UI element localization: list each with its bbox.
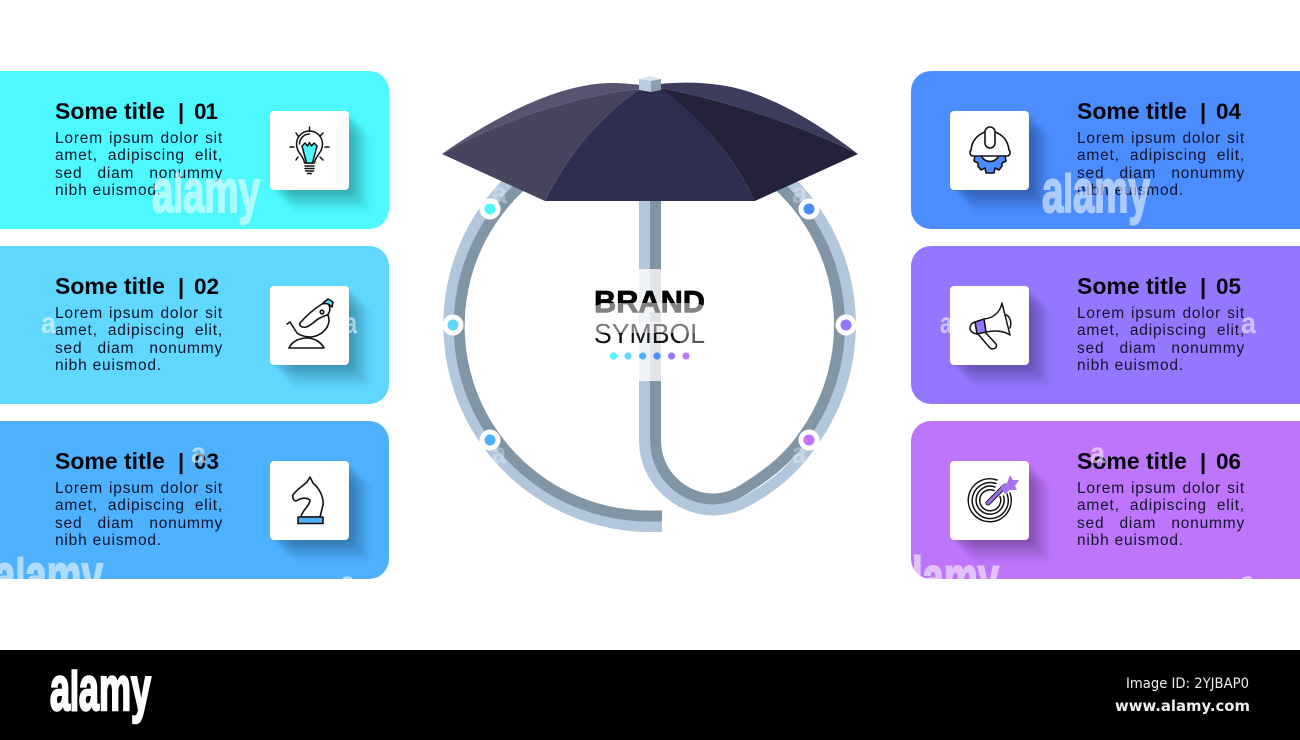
- body text: nibh euismod.: [1077, 532, 1184, 549]
- panel: 04: [911, 71, 1300, 229]
- body text: nibh euismod.: [1077, 357, 1184, 374]
- title: [55, 448, 219, 474]
- body text: amet, adipiscing elit,: [1077, 497, 1245, 514]
- icon card: light bulb: [270, 111, 349, 190]
- title: [55, 98, 218, 124]
- watermarks: a: [1240, 566, 1255, 599]
- icon card: megaphone: [950, 286, 1029, 365]
- body text: [55, 130, 223, 199]
- body text: amet, adipiscing elit,: [55, 147, 223, 164]
- watermarks: a: [1090, 437, 1105, 470]
- watermarks: a: [1241, 307, 1256, 340]
- icon card: chess knight: [270, 461, 349, 540]
- colour dots: [610, 352, 690, 360]
- body text: [55, 480, 223, 549]
- title: |: [1200, 99, 1206, 124]
- body text: sed diam nonummy: [55, 515, 223, 532]
- body text: amet, adipiscing elit,: [55, 497, 223, 514]
- watermarks: a: [492, 177, 507, 210]
- watermarks: lamy: [912, 545, 999, 608]
- watermarks: a: [792, 437, 806, 470]
- icon card: helmet and gear: [950, 111, 1029, 190]
- brand symbol text: BRAND: [594, 284, 705, 319]
- body text: [1077, 130, 1245, 199]
- title: [1077, 273, 1241, 300]
- pole highlight band: [639, 269, 661, 381]
- icon card: microscope: [270, 286, 349, 365]
- umbrella handle and ring: [449, 164, 850, 526]
- body text: nibh euismod.: [55, 532, 162, 549]
- umbrella canopy: [442, 76, 858, 201]
- title: 03: [194, 449, 219, 474]
- title: 02: [194, 274, 219, 299]
- website: www.alamy.com: [1115, 697, 1250, 715]
- body text: [1077, 480, 1245, 549]
- watermarks: a: [792, 177, 807, 210]
- watermarks: alamy: [1042, 158, 1150, 225]
- title: [1077, 98, 1241, 124]
- panel: 01: [0, 71, 389, 229]
- title: Some title: [55, 448, 165, 474]
- body text: Lorem ipsum dolor sit: [55, 480, 223, 497]
- title: 01: [194, 99, 217, 124]
- watermarks: a: [345, 307, 357, 340]
- body text: nibh euismod.: [1077, 182, 1184, 199]
- body text: Lorem ipsum dolor sit: [55, 305, 223, 322]
- panel: 05: [911, 246, 1300, 404]
- body text: Lorem ipsum dolor sit: [1077, 305, 1245, 322]
- brand symbol text: [594, 284, 706, 349]
- panel: 02: [0, 246, 389, 404]
- body text: nibh euismod.: [55, 182, 162, 199]
- body text: [1077, 305, 1245, 374]
- body text: amet, adipiscing elit,: [55, 322, 223, 339]
- title: |: [178, 449, 184, 474]
- title: [1077, 448, 1241, 474]
- body text: Lorem ipsum dolor sit: [1077, 130, 1245, 147]
- watermarks: a: [940, 307, 952, 340]
- title: 05: [1216, 274, 1241, 299]
- body text: amet, adipiscing elit,: [1077, 322, 1245, 339]
- title: [55, 273, 219, 300]
- title: Some title: [1077, 273, 1187, 299]
- footer bar: [0, 650, 1300, 740]
- footer logo: alamy: [50, 655, 151, 724]
- title: |: [178, 274, 184, 299]
- body text: Lorem ipsum dolor sit: [55, 130, 223, 147]
- watermarks: alamy: [152, 158, 260, 225]
- watermarks: a: [340, 566, 355, 599]
- body text: sed diam nonummy: [1077, 515, 1245, 532]
- brand symbol text: SYMBOL: [594, 318, 705, 349]
- title: Some title: [55, 273, 165, 299]
- image id: Image ID: 2YJBAP0: [1126, 676, 1249, 692]
- body text: sed diam nonummy: [1077, 165, 1245, 182]
- body text: amet, adipiscing elit,: [1077, 147, 1245, 164]
- body text: sed diam nonummy: [55, 165, 223, 182]
- body text: [55, 305, 223, 374]
- body text: sed diam nonummy: [1077, 340, 1245, 357]
- title: 04: [1216, 99, 1241, 124]
- canopy cap: [639, 76, 661, 92]
- title: |: [178, 99, 184, 124]
- title: Some title: [55, 98, 165, 124]
- watermarks: a: [41, 307, 56, 340]
- title: 06: [1216, 449, 1241, 474]
- left arc: [449, 164, 662, 526]
- body text: nibh euismod.: [55, 357, 162, 374]
- title: Some title: [1077, 448, 1187, 474]
- watermarks: a: [191, 437, 206, 470]
- title: Some title: [1077, 98, 1187, 124]
- title: |: [1200, 274, 1206, 299]
- watermarks: a: [492, 437, 506, 470]
- panel: 06: [911, 421, 1300, 579]
- icon card: target with arrow: [950, 461, 1029, 540]
- panel: 03: [0, 421, 389, 579]
- pole and right arc: [644, 164, 850, 510]
- title: |: [1200, 449, 1206, 474]
- body text: Lorem ipsum dolor sit: [1077, 480, 1245, 497]
- body text: sed diam nonummy: [55, 340, 223, 357]
- ring markers: [442, 198, 856, 450]
